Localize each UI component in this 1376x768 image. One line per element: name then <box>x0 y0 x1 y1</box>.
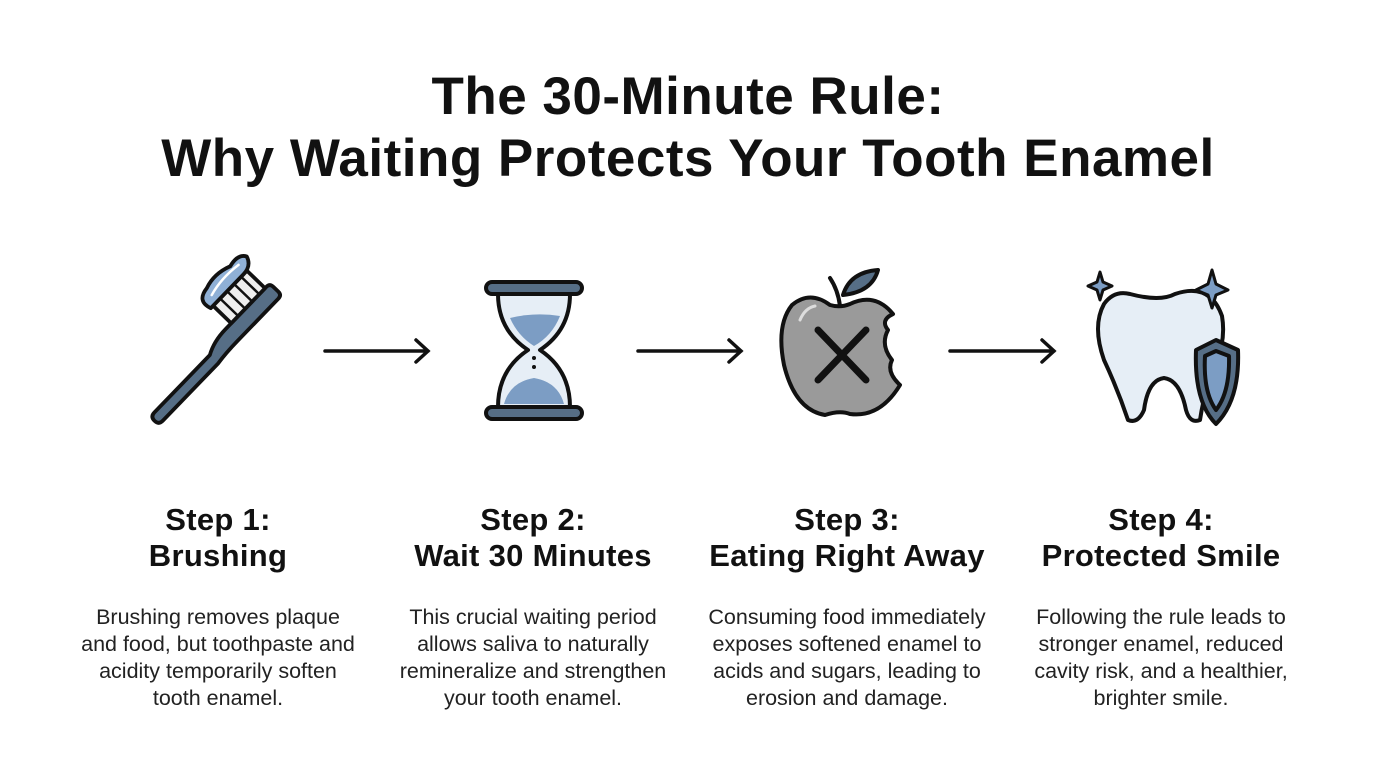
step 3: Step 3: <box>794 502 900 537</box>
step 1: Brushing removes plaque <box>96 605 340 629</box>
step 2: Wait 30 Minutes <box>414 538 652 573</box>
step 1 <box>81 502 355 710</box>
step 4: cavity risk, and a healthier, <box>1034 659 1288 683</box>
arrow 3 <box>950 340 1054 362</box>
step 1: tooth enamel. <box>153 686 283 710</box>
arrow 2 <box>638 340 741 362</box>
step 4 <box>1034 502 1288 710</box>
step 2: allows saliva to naturally <box>417 632 649 656</box>
icon: hourglass <box>486 282 582 419</box>
step 3: erosion and damage. <box>746 686 948 710</box>
title: The 30-Minute Rule: <box>431 67 945 126</box>
step 4: stronger enamel, reduced <box>1038 632 1284 656</box>
title <box>161 67 1215 188</box>
step 2: remineralize and strengthen <box>400 659 666 683</box>
step 4: Step 4: <box>1108 502 1214 537</box>
step 4: Protected Smile <box>1042 538 1280 573</box>
title: Why Waiting Protects Your Tooth Enamel <box>161 129 1215 188</box>
arrow 1 <box>325 340 428 362</box>
step 2: This crucial waiting period <box>409 605 657 629</box>
icon: apple with x <box>781 270 900 415</box>
step 2: your tooth enamel. <box>444 686 622 710</box>
step 3: acids and sugars, leading to <box>713 659 981 683</box>
step 2: Step 2: <box>480 502 586 537</box>
step 1: and food, but toothpaste and <box>81 632 355 656</box>
icon: tooth with shield <box>1088 270 1238 424</box>
step 2 <box>400 502 666 710</box>
icon: toothbrush <box>114 250 285 425</box>
step 4: Following the rule leads to <box>1036 605 1286 629</box>
step 1: Brushing <box>149 538 287 573</box>
step 1: acidity temporarily soften <box>99 659 337 683</box>
step 1: Step 1: <box>165 502 271 537</box>
step 3 <box>708 502 986 710</box>
step 3: Consuming food immediately <box>708 605 986 629</box>
step 3: exposes softened enamel to <box>713 632 981 656</box>
step 4: brighter smile. <box>1093 686 1228 710</box>
step 3: Eating Right Away <box>709 538 985 573</box>
